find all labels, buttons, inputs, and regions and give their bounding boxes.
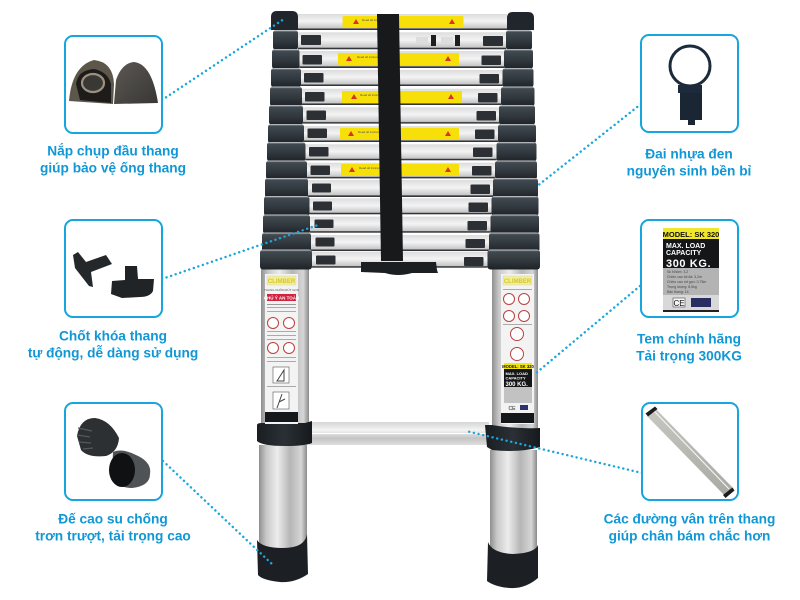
panel: lock pin bbox=[65, 220, 162, 317]
right foot bbox=[487, 542, 538, 588]
icon: capacity sticker: Chiều cao rút gọn: 0,75m bbox=[667, 280, 706, 284]
right warning label with 300 KG capacity: CE bbox=[509, 406, 516, 412]
caption: rubber foot: trơn trượt, tải trọng cao bbox=[35, 528, 191, 544]
caption: end cap: Nắp chụp đầu thang bbox=[47, 144, 179, 158]
icon: capacity sticker: MODEL: SK 320 bbox=[663, 230, 719, 239]
icon: capacity sticker bbox=[663, 228, 719, 312]
leader lines bbox=[162, 19, 642, 564]
yellow safety stickers bbox=[338, 16, 464, 176]
icon: capacity sticker: CAPACITY bbox=[666, 250, 702, 257]
left warning label: CLIMBER bbox=[268, 279, 296, 285]
icon: capacity sticker: 300 KG. bbox=[666, 258, 711, 270]
icon: capacity sticker: Chiều cao tối đa: 3,2m bbox=[667, 275, 702, 279]
icon: capacity sticker: MAX. LOAD bbox=[666, 243, 705, 250]
caption: ribbed rung: Các đường vân trên thang bbox=[604, 512, 775, 526]
icon: capacity sticker: Bậc thang: 14 bbox=[667, 290, 689, 294]
left warning label: THANG NHÔM RÚT GỌN bbox=[264, 287, 299, 292]
icon: capacity sticker: CE bbox=[673, 299, 685, 308]
caption: lock pin: tự động, dễ dàng sử dụng bbox=[28, 346, 198, 360]
caption: lock pin: Chốt khóa thang bbox=[59, 328, 167, 344]
icon: closed end cap bbox=[114, 62, 158, 104]
caption: genuine label: Tải trọng 300KG bbox=[636, 348, 742, 364]
icon: diagonal rung bbox=[646, 406, 734, 498]
left upper tube bbox=[261, 266, 309, 424]
icon: capacity sticker: Sk Nhôm: 3,2 bbox=[667, 270, 688, 274]
right upper tube bbox=[492, 266, 538, 428]
ladder bbox=[257, 11, 540, 588]
icon: open end cap bbox=[69, 60, 114, 104]
rung lock slots bbox=[301, 35, 503, 266]
right warning label with 300 KG capacity: 300 KG. bbox=[506, 382, 528, 388]
left foot bbox=[257, 534, 308, 582]
caption: end cap: giúp bảo vệ ống thang bbox=[40, 160, 186, 176]
right collar bbox=[485, 425, 540, 451]
caption: ribbed rung bbox=[604, 512, 775, 544]
icon: lock pin right bbox=[111, 266, 154, 298]
icon: lock pin left bbox=[73, 252, 112, 287]
caption: genuine label: Tem chính hãng bbox=[637, 332, 741, 346]
caption: genuine label bbox=[636, 332, 742, 364]
yellow safety stickers: Read all instructions bbox=[362, 18, 390, 22]
caption: plastic clamp bbox=[627, 146, 752, 178]
icon: capacity sticker: Trọng lượng: 8,5kg bbox=[667, 285, 697, 289]
panel: plastic clamp bbox=[641, 35, 738, 132]
right warning label with 300 KG capacity: MODEL: SK 320 bbox=[502, 364, 534, 369]
panel: ribbed rung bbox=[642, 403, 738, 500]
icon: plastic ring clamp bbox=[670, 46, 710, 125]
left warning label bbox=[264, 274, 299, 424]
black centre strap bbox=[377, 14, 403, 261]
yellow safety stickers: Read all instructions bbox=[357, 55, 385, 59]
caption: end cap bbox=[40, 144, 186, 176]
panel: rubber foot bbox=[65, 403, 162, 500]
yellow safety stickers: Read all instructions bbox=[359, 166, 387, 170]
left black collars bbox=[260, 30, 312, 270]
left collar bbox=[257, 421, 312, 446]
caption: rubber foot bbox=[35, 512, 191, 544]
rungs bbox=[298, 14, 507, 268]
strap handle bbox=[361, 262, 438, 275]
right black collars bbox=[488, 30, 540, 270]
bottom rung bbox=[309, 422, 489, 445]
right warning label with 300 KG capacity: MAX. LOAD bbox=[506, 371, 528, 376]
yellow safety stickers: Read all instructions bbox=[360, 93, 388, 97]
panel: genuine label bbox=[641, 220, 738, 317]
yellow safety stickers: Read all instructions bbox=[358, 130, 386, 134]
icon: foot cup bbox=[109, 451, 150, 488]
caption: plastic clamp: nguyên sinh bền bỉ bbox=[627, 164, 752, 178]
icon: ribbed foot bbox=[77, 418, 119, 456]
right warning label with 300 KG capacity: CAPACITY bbox=[506, 376, 526, 380]
left warning label: CHÚ Ý AN TOÀN bbox=[264, 294, 299, 300]
left lower tube bbox=[259, 445, 307, 550]
caption: plastic clamp: Đai nhựa đen bbox=[645, 146, 733, 162]
caption: lock pin bbox=[28, 328, 198, 360]
caption: ribbed rung: giúp chân bám chắc hơn bbox=[609, 528, 770, 544]
right lower tube bbox=[490, 450, 537, 556]
right warning label with 300 KG capacity: CLIMBER bbox=[504, 279, 532, 285]
caption: rubber foot: Đế cao su chống bbox=[58, 512, 168, 526]
top end caps bbox=[271, 11, 534, 30]
right warning label with 300 KG capacity bbox=[501, 274, 534, 424]
panel: end cap bbox=[65, 36, 162, 133]
